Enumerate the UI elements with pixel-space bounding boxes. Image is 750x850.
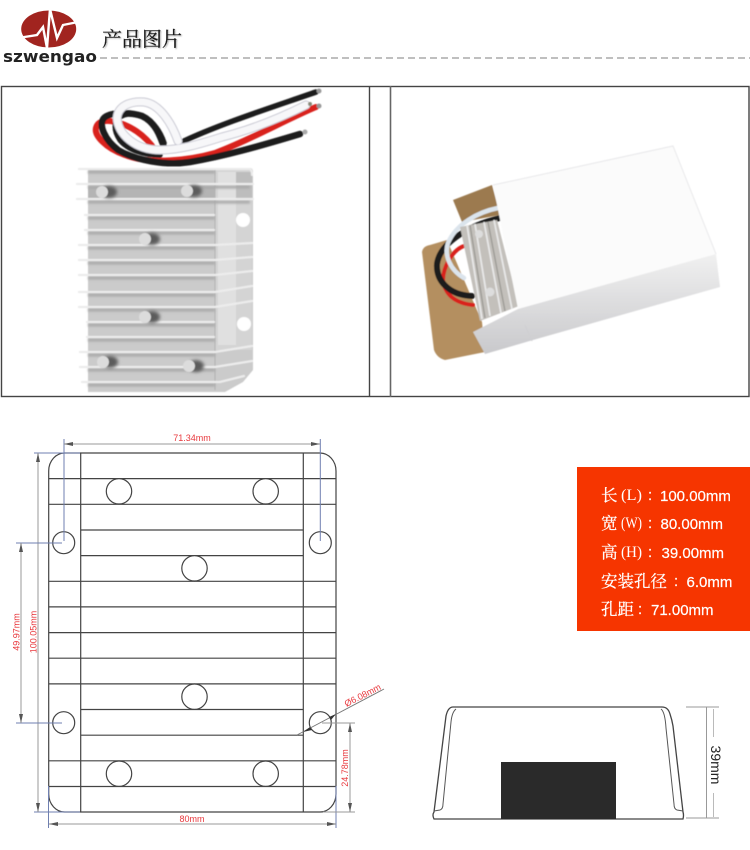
heading: 产品图片 <box>103 29 183 52</box>
mounting holes <box>53 532 331 734</box>
panel: photo frame <box>2 86 749 397</box>
dimension: 49.97mm: 49.97mm <box>12 613 22 651</box>
spec: hole diameter: : <box>674 573 678 590</box>
spec: hole spacing: 孔距 <box>601 600 634 619</box>
dimension: 71.34mm: 71.34mm <box>173 433 211 443</box>
spec: hole spacing: : <box>638 601 642 618</box>
heading: 产品图片 <box>102 28 182 51</box>
spec: width: : <box>648 515 652 532</box>
spec: length: 100.00mm <box>660 488 731 505</box>
brand name: szwengao <box>3 47 97 66</box>
spec: hole diameter <box>601 572 732 591</box>
spec: width: (W) <box>621 515 642 532</box>
dimension: 80mm <box>48 786 336 828</box>
spec: length: : <box>648 487 652 504</box>
dimension: 39mm: 39mm <box>708 746 724 784</box>
photo: aluminium converter with wires <box>77 88 322 392</box>
spec: height: 39.00mm <box>662 545 724 562</box>
spec: hole spacing: 71.00mm <box>651 602 714 619</box>
spec: hole spacing <box>601 600 714 619</box>
outline and fins <box>49 453 336 812</box>
spec: length: (L) <box>621 487 642 504</box>
dimension: 24.78mm: 24.78mm <box>340 749 350 787</box>
white box <box>473 146 720 354</box>
photo: converter in white box <box>422 146 720 360</box>
dimension: hole diameter: Ø6.08mm <box>343 682 383 709</box>
wires <box>96 88 322 163</box>
pins <box>96 185 204 372</box>
dimension: 100.05mm: 100.05mm <box>28 611 38 653</box>
spec: width <box>601 514 723 533</box>
dimension: 100.05mm <box>28 453 80 812</box>
spec: length <box>601 486 731 505</box>
icon: red ellipse with pulse <box>18 9 78 48</box>
technical drawing: side view <box>433 707 724 819</box>
spec: height: : <box>648 544 652 561</box>
spec: width: 80.00mm <box>660 516 723 533</box>
spec: length: 长 <box>601 486 618 505</box>
cardboard flaps <box>422 185 500 360</box>
housing <box>77 168 253 392</box>
technical drawing: top view <box>12 433 384 828</box>
spec: height: 高 <box>601 543 618 562</box>
connector block <box>501 762 616 819</box>
panel: dimensions callout <box>577 467 750 631</box>
housing outline <box>433 707 684 819</box>
wires in box <box>437 208 500 305</box>
converter <box>460 220 519 321</box>
spec: height: (H) <box>621 544 642 561</box>
spec: hole diameter: 6.0mm <box>686 574 732 591</box>
spec: height <box>601 543 724 562</box>
dimension: 49.97mm <box>12 543 62 723</box>
logo: szwengao <box>3 9 97 66</box>
spec: hole diameter: 安装孔径 <box>601 572 668 591</box>
mounting holes <box>236 213 251 331</box>
dimension: hole diameter <box>297 682 384 735</box>
dimension: 80mm: 80mm <box>179 814 205 824</box>
dimension: 24.78mm <box>322 723 355 812</box>
dimension: 39mm <box>686 707 724 818</box>
pins <box>106 479 278 786</box>
spec: width: 宽 <box>601 514 618 533</box>
dimension: 71.34mm <box>64 433 320 541</box>
